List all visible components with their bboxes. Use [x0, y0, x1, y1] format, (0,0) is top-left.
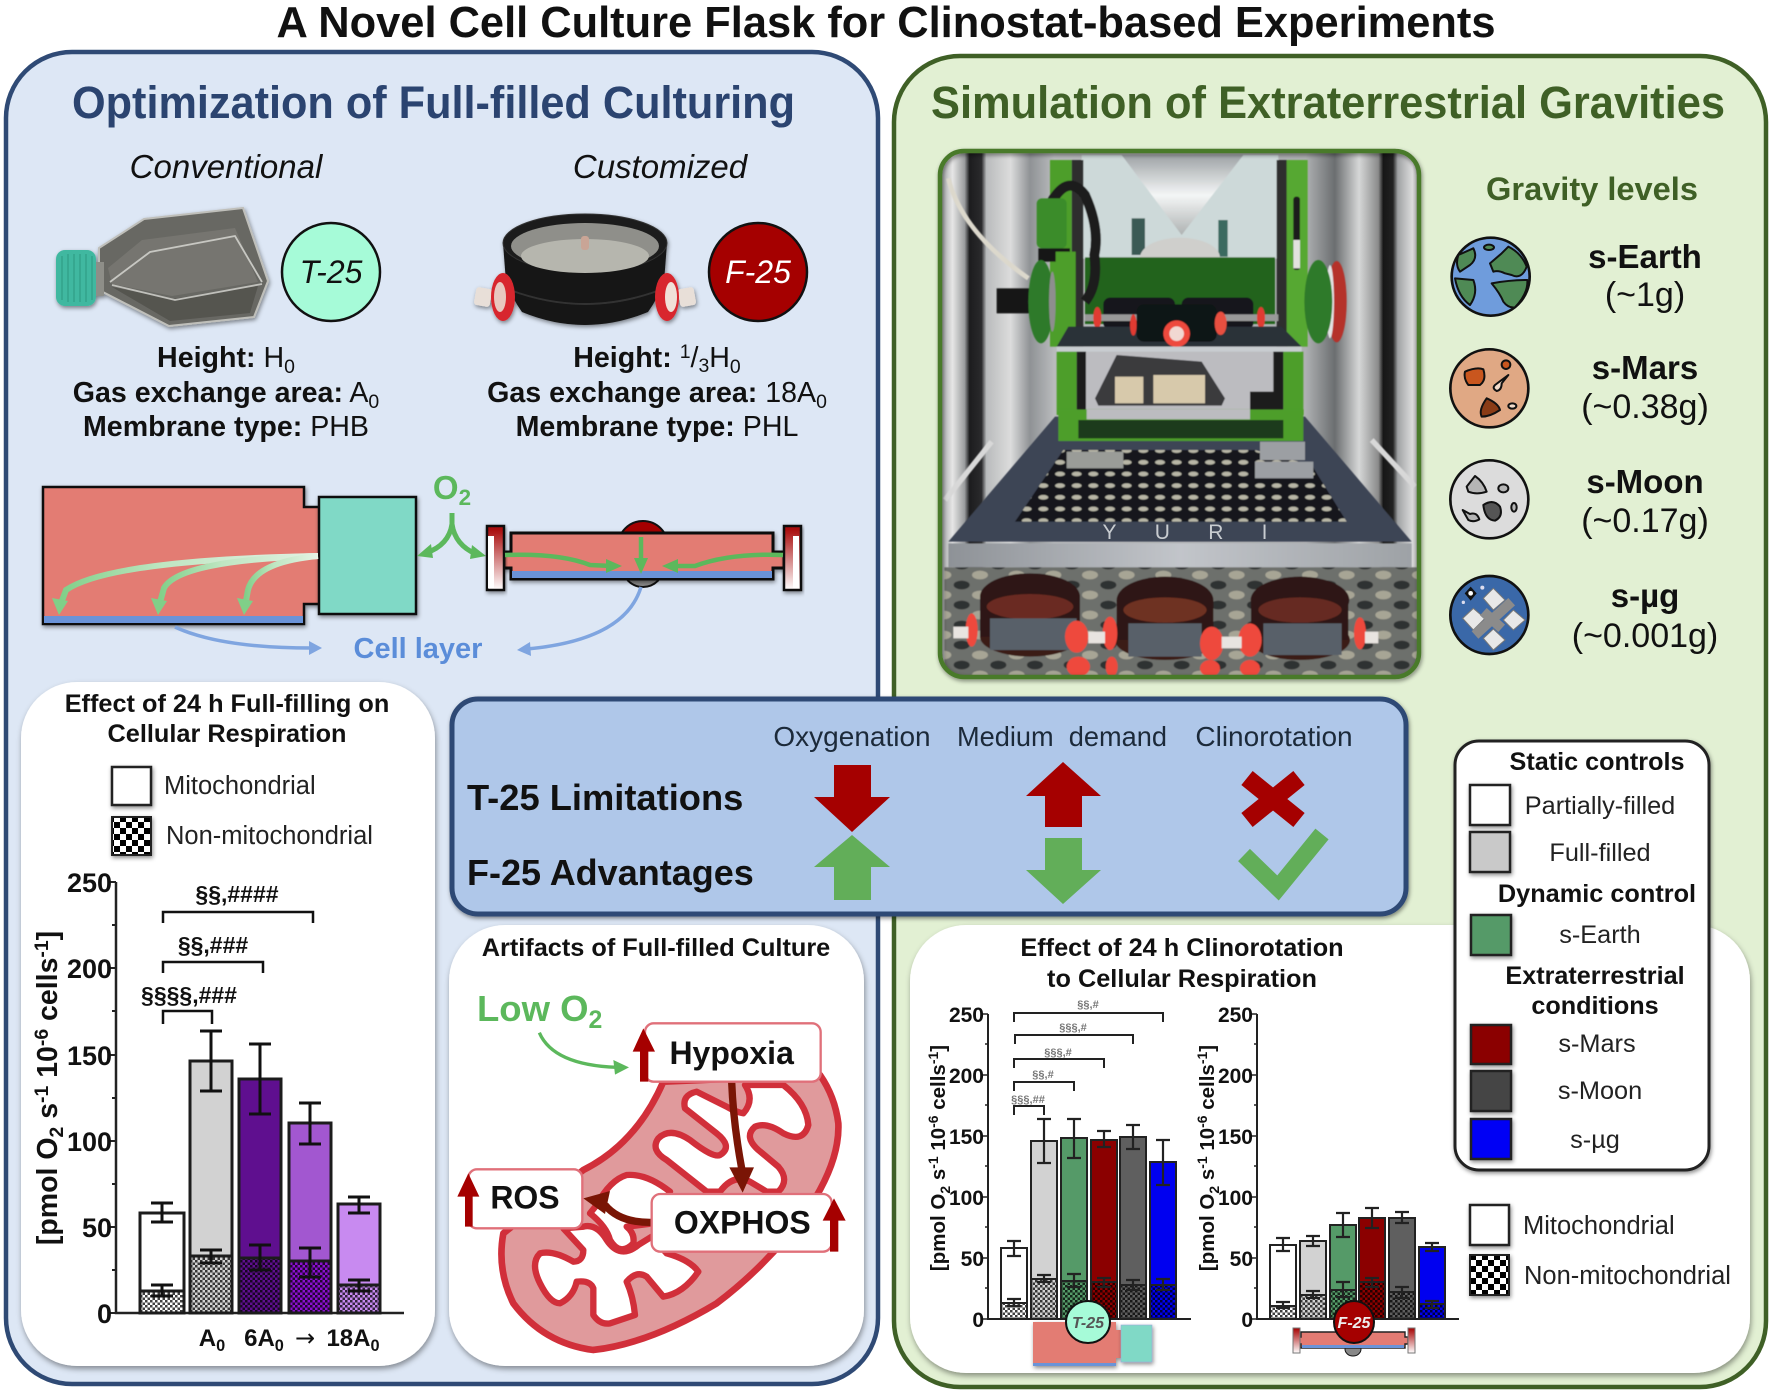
diagram: F-25 cross-section	[487, 521, 801, 590]
significance brackets: §§,###	[178, 932, 248, 958]
box: OXPHOS: OXPHOS	[674, 1204, 811, 1240]
label: s-µg: s-µg	[1611, 577, 1679, 614]
x axis labels: →	[295, 1324, 315, 1352]
icon: mars	[1450, 349, 1528, 427]
legend heading: static controls: Static controls	[1510, 748, 1684, 776]
box: OXPHOS	[652, 1194, 846, 1252]
panel: effect of full-filling chart	[21, 682, 435, 1366]
F-25 mini flask and badge	[1293, 1301, 1415, 1356]
icon: medium down, F-25	[1026, 838, 1101, 904]
y axis: 150	[67, 1041, 112, 1071]
text: F-25 specifications: Height:	[573, 342, 672, 374]
y axis: 0	[97, 1299, 112, 1329]
T-25 error bars	[1007, 1119, 1170, 1306]
legend: respiration type: Non-mitochondrial	[1524, 1262, 1731, 1290]
y axis: s	[32, 1103, 64, 1127]
T-25 mini flask and badge	[1033, 1301, 1152, 1366]
legend item: s-Mars: s-Mars	[1558, 1030, 1636, 1058]
chart: T-25 respiration	[925, 999, 1191, 1366]
arrow: O2 fork	[417, 513, 486, 559]
F-25 axes: 250	[1218, 1004, 1253, 1027]
panel: artifacts of full-filled culture	[449, 925, 864, 1366]
F-25 error bars	[1276, 1208, 1439, 1308]
x axis labels: 6A	[244, 1325, 275, 1352]
y axis: 2	[46, 1127, 68, 1138]
chart title: Cellular Respiration	[108, 720, 346, 748]
y axis: 50	[82, 1213, 112, 1243]
chart title	[1020, 934, 1344, 993]
row label: F-25 advantages: F-25 Advantages	[467, 852, 754, 893]
legend item: s-µg: s-µg	[1570, 1126, 1620, 1154]
legend item: partially-filled: Partially-filled	[1525, 792, 1675, 820]
arrow: hypoxia to OXPHOS	[729, 1082, 754, 1193]
legend: respiration type: Non-mitochondrial	[166, 822, 373, 850]
label: O2: O	[433, 469, 459, 506]
label: customized: Customized	[573, 148, 749, 185]
bars	[140, 1061, 380, 1313]
error bars	[151, 1031, 370, 1296]
legend heading: extraterrestrial conditions: conditions	[1531, 992, 1659, 1020]
panel: simulation of extraterrestrial gravities	[894, 56, 1766, 1387]
text: T-25 specifications: Membrane type: PHB	[83, 411, 369, 443]
F-25 axes: -1	[1194, 1052, 1210, 1064]
F-25 axes: 100	[1218, 1187, 1253, 1210]
text: F-25 specifications: Membrane type: PHL	[516, 411, 798, 443]
T-25 axes: -1	[925, 1052, 941, 1064]
T-25 axes: cells	[927, 1064, 950, 1115]
arrowheads: T-25 oxygen	[52, 598, 253, 615]
heading: simulation: Simulation of Extraterrestrial Gravities	[931, 77, 1725, 128]
T-25 axes: ]	[927, 1045, 950, 1052]
icon: oxygenation down, T-25	[814, 765, 890, 832]
T-25 significance brackets: §§§,##	[1011, 1094, 1045, 1106]
legend: respiration type	[1470, 1205, 1731, 1295]
T-25 axes: 0	[972, 1309, 984, 1332]
label: cell layer: Cell layer	[354, 633, 482, 665]
y axis: -1	[31, 940, 53, 958]
text: F-25 specifications: /	[691, 342, 699, 374]
arrows: oxygen diffusion in F-25	[505, 537, 783, 574]
label: O2: 2	[459, 485, 471, 510]
y axis	[31, 868, 404, 1329]
legend item: full-filled: Full-filled	[1549, 839, 1651, 867]
row label: T-25 limitations: T-25 Limitations	[467, 777, 743, 818]
icon: T-25 flask photo	[56, 208, 268, 326]
y axis: -6	[31, 1029, 53, 1046]
arrows: oxygen diffusion in T-25	[60, 556, 318, 606]
text: F-25 specifications: Gas exchange area: 18A	[487, 377, 816, 409]
F-25 axes: [pmol O	[1196, 1194, 1219, 1271]
column label: medium demand: Medium demand	[957, 721, 1167, 752]
icon: T-25 badge: T-25	[300, 254, 363, 290]
icon: F-25 badge: F-25	[725, 254, 791, 290]
F-25 axes: s	[1196, 1169, 1219, 1186]
arrow: cell layer to F-25	[517, 587, 641, 656]
legend: conditions	[1455, 741, 1709, 1170]
x axis labels: A	[199, 1325, 216, 1352]
text: F-25 specifications: 0	[730, 356, 741, 378]
T-25 axes: 100	[949, 1187, 984, 1210]
F-25 axes: 150	[1218, 1126, 1253, 1149]
legend: respiration type	[112, 767, 373, 855]
arrow: low O2 to hypoxia	[539, 1033, 629, 1075]
y axis: [pmol O	[32, 1138, 64, 1245]
T-25 axes: 200	[949, 1065, 984, 1088]
T-25 axes: s	[927, 1169, 950, 1186]
lower part of device	[944, 409, 1418, 677]
significance brackets: §§,####	[195, 881, 279, 907]
text: F-25 specifications: 3	[698, 355, 709, 377]
label: s-Earth	[1588, 238, 1702, 314]
label: low O2: Low O	[477, 988, 589, 1029]
text: T-25 specifications: Height: H	[157, 342, 284, 374]
F-25 axes: -1	[1194, 1156, 1210, 1169]
legend heading: extraterrestrial conditions	[1505, 962, 1685, 1020]
T-25 axes: -1	[925, 1156, 941, 1169]
y axis: -1	[31, 1085, 53, 1103]
F-25 axes: -6	[1194, 1115, 1210, 1128]
label: s-Mars: s-Mars	[1592, 349, 1698, 386]
T-25 axes	[925, 1004, 1191, 1332]
T-25 axes: 10	[927, 1128, 950, 1156]
panel: effect of clinorotation chart	[910, 925, 1750, 1373]
label: s-Moon: s-Moon	[1586, 463, 1704, 500]
legend item: partially-filled	[1470, 785, 1675, 825]
icon: cross	[1247, 778, 1299, 820]
y axis: 250	[67, 868, 112, 898]
box: ROS	[457, 1169, 582, 1228]
legend item: s-Earth: s-Earth	[1559, 921, 1641, 949]
icon: space station	[1450, 576, 1528, 654]
T-25 significance brackets: §§,#	[1032, 1069, 1054, 1081]
T-25 axes: -6	[925, 1115, 941, 1128]
label: s-Mars	[1581, 349, 1709, 426]
column label: clinorotation: Clinorotation	[1195, 721, 1353, 752]
text: F-25 specifications: 0	[816, 391, 827, 413]
text: T-25 specifications: Gas exchange area: A	[73, 377, 368, 409]
x axis labels: 18A	[326, 1325, 370, 1352]
text: T-25 specifications: 0	[284, 356, 295, 378]
legend item: s-µg	[1471, 1119, 1620, 1159]
y axis: 100	[67, 1127, 112, 1157]
label: s-Mars: (~0.38g)	[1581, 388, 1709, 426]
x axis labels	[199, 1324, 380, 1355]
legend item: s-Mars	[1471, 1025, 1636, 1064]
icon: check	[1244, 834, 1322, 888]
heading: optimization: Optimization of Full-filled Culturing	[72, 77, 795, 128]
y axis: 200	[67, 954, 112, 984]
T-25 axes: [pmol O	[927, 1194, 950, 1271]
text: T-25 specifications: 0	[368, 391, 379, 413]
significance brackets: §§§§,###	[141, 982, 237, 1008]
label: low O2: 2	[589, 1007, 602, 1034]
label: s-µg: (~0.001g)	[1572, 617, 1718, 655]
y axis: 10	[32, 1046, 64, 1086]
F-25 axes: cells	[1196, 1064, 1219, 1115]
T-25 significance brackets	[1011, 999, 1163, 1115]
label: conventional: Conventional	[130, 148, 324, 185]
T-25 significance brackets: §§,#	[1077, 999, 1099, 1011]
column label: oxygenation: Oxygenation	[773, 721, 931, 752]
legend item: s-Moon: s-Moon	[1558, 1077, 1642, 1105]
heading: artifacts: Artifacts of Full-filled Culture	[482, 934, 830, 962]
significance brackets	[141, 881, 313, 1024]
label: s-µg	[1572, 577, 1718, 655]
heading: gravity levels: Gravity levels	[1486, 170, 1698, 207]
arrow: cell layer to T-25	[175, 627, 322, 655]
x axis labels: 0	[216, 1337, 225, 1355]
T-25 bars	[1001, 1137, 1176, 1319]
photo frame	[940, 151, 1419, 677]
F-25 mini flask and badge: F-25	[1338, 1315, 1372, 1332]
label: s-Earth: s-Earth	[1588, 238, 1702, 275]
T-25 axes: 2	[937, 1186, 953, 1194]
x axis labels: 0	[370, 1337, 380, 1355]
box: hypoxia	[633, 1023, 821, 1082]
legend item: s-Moon	[1471, 1071, 1642, 1111]
y axis: cells	[32, 958, 64, 1029]
F-25 axes: 200	[1218, 1065, 1253, 1088]
icon: oxygenation up, F-25	[814, 835, 890, 900]
legend: respiration type: Mitochondrial	[1523, 1212, 1675, 1240]
chart title: Effect of 24 h Clinorotation	[1020, 934, 1344, 962]
label: s-Moon: (~0.17g)	[1581, 502, 1709, 540]
icon: medium up, T-25	[1026, 762, 1101, 827]
legend item: full-filled	[1470, 832, 1651, 872]
T-25 axes: 250	[949, 1004, 984, 1027]
F-25 axes: 50	[1230, 1248, 1253, 1271]
photo label: YURI: YURI	[1102, 521, 1268, 544]
arrow: OXPHOS to ROS	[583, 1191, 653, 1222]
label: s-Moon	[1581, 463, 1709, 540]
text: F-25 specifications: 1	[680, 341, 691, 363]
legend item: s-Earth	[1471, 915, 1641, 955]
F-25 axes: ]	[1196, 1045, 1219, 1052]
F-25 axes: 0	[1241, 1309, 1253, 1332]
icon: moon	[1450, 460, 1528, 538]
legend heading: extraterrestrial conditions: Extraterrestrial	[1505, 962, 1685, 990]
icon: earth	[1452, 238, 1530, 316]
x axis labels: 0	[275, 1337, 284, 1355]
F-25 bars	[1270, 1218, 1445, 1319]
icon: F-25 badge	[709, 223, 807, 321]
upper part of device	[948, 155, 1347, 415]
T-25 mini flask and badge: T-25	[1072, 1315, 1105, 1332]
chart title	[65, 690, 389, 748]
box: ROS: ROS	[490, 1180, 560, 1216]
text: F-25 specifications	[487, 341, 827, 443]
photo: clinostat device	[938, 150, 1422, 680]
box: hypoxia: Hypoxia	[669, 1035, 794, 1071]
icon: mitochondrion	[457, 1023, 846, 1350]
icon: F-25 flask photo	[474, 214, 696, 325]
T-25 significance brackets: §§§,#	[1059, 1022, 1087, 1034]
y axis: ]	[32, 931, 64, 940]
chart: F-25 respiration	[1194, 1004, 1459, 1356]
panel: optimization of full-filled culturing	[6, 52, 878, 1384]
F-25 axes: 10	[1196, 1128, 1219, 1156]
T-25 significance brackets: §§§,#	[1044, 1047, 1072, 1059]
T-25 axes: 50	[961, 1248, 984, 1271]
icon: T-25 badge	[282, 223, 380, 321]
text: F-25 specifications: H	[709, 342, 730, 374]
chart title: Effect of 24 h Full-filling on	[65, 690, 389, 718]
F-25 axes: 2	[1206, 1186, 1222, 1194]
legend: respiration type: Mitochondrial	[164, 772, 316, 800]
panel: limitations and advantages	[452, 699, 1406, 914]
label: s-Earth: (~1g)	[1605, 276, 1685, 314]
F-25 axes	[1194, 1004, 1459, 1332]
legend heading: dynamic control: Dynamic control	[1498, 880, 1696, 908]
chart title: to Cellular Respiration	[1047, 965, 1317, 993]
diagram: T-25 cross-section	[43, 487, 416, 624]
T-25 axes: 150	[949, 1126, 984, 1149]
text: T-25 specifications	[73, 342, 379, 443]
